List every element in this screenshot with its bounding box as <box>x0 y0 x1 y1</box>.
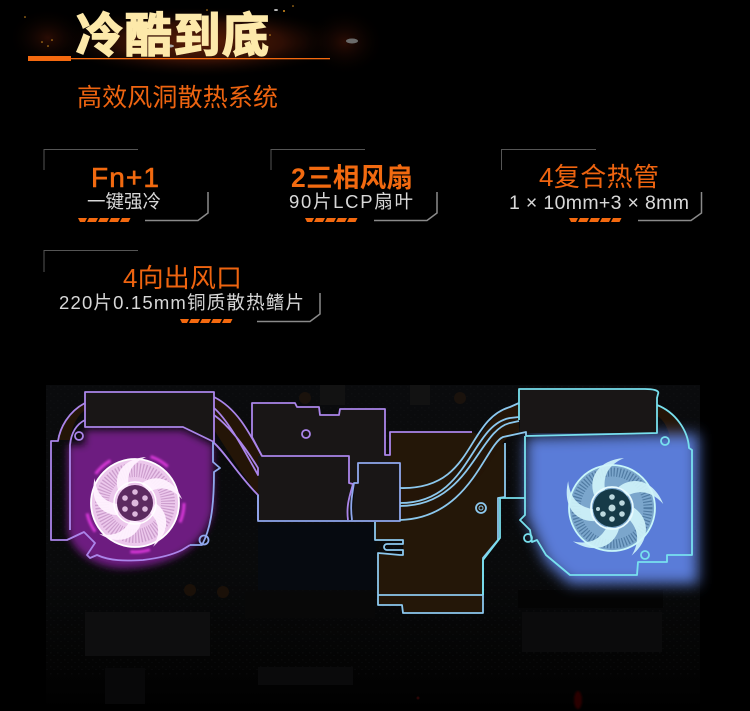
feature: four air vents: 4向出风口 <box>123 263 242 293</box>
title: 冷酷到底 <box>76 9 269 62</box>
motherboard background <box>46 385 700 711</box>
left fan <box>86 454 184 552</box>
feature: three-phase fan <box>271 150 437 222</box>
feature: four air vents: 220片0.15mm铜质散热鳍片 <box>59 292 304 313</box>
feature: composite heat pipes <box>502 150 702 222</box>
feature: Fn+1 <box>44 150 208 222</box>
copper plate <box>375 432 505 613</box>
title underline <box>28 56 330 61</box>
blue fan glow <box>526 434 698 584</box>
heat pipes fill <box>58 397 689 520</box>
feature: three-phase fan: 2三相风扇 <box>291 163 413 193</box>
cooling system outline <box>51 389 692 613</box>
feature: composite heat pipes: 1 × 10mm+3 × 8mm <box>509 192 689 214</box>
heat sink and die blocks <box>85 390 657 522</box>
feature: composite heat pipes: 4复合热管 <box>539 162 659 192</box>
background: fire and sparks <box>8 5 385 78</box>
feature: Fn+1: 一键强冷 <box>87 191 161 212</box>
feature: four air vents <box>44 250 320 323</box>
ambient ember bottom <box>416 691 582 709</box>
feature: Fn+1: Fn+1 <box>91 162 159 193</box>
subtitle: 高效风洞散热系统 <box>77 84 278 112</box>
purple fan glow <box>68 430 213 568</box>
right fan <box>558 458 663 560</box>
feature: three-phase fan: 90片LCP扇叶 <box>289 191 413 212</box>
